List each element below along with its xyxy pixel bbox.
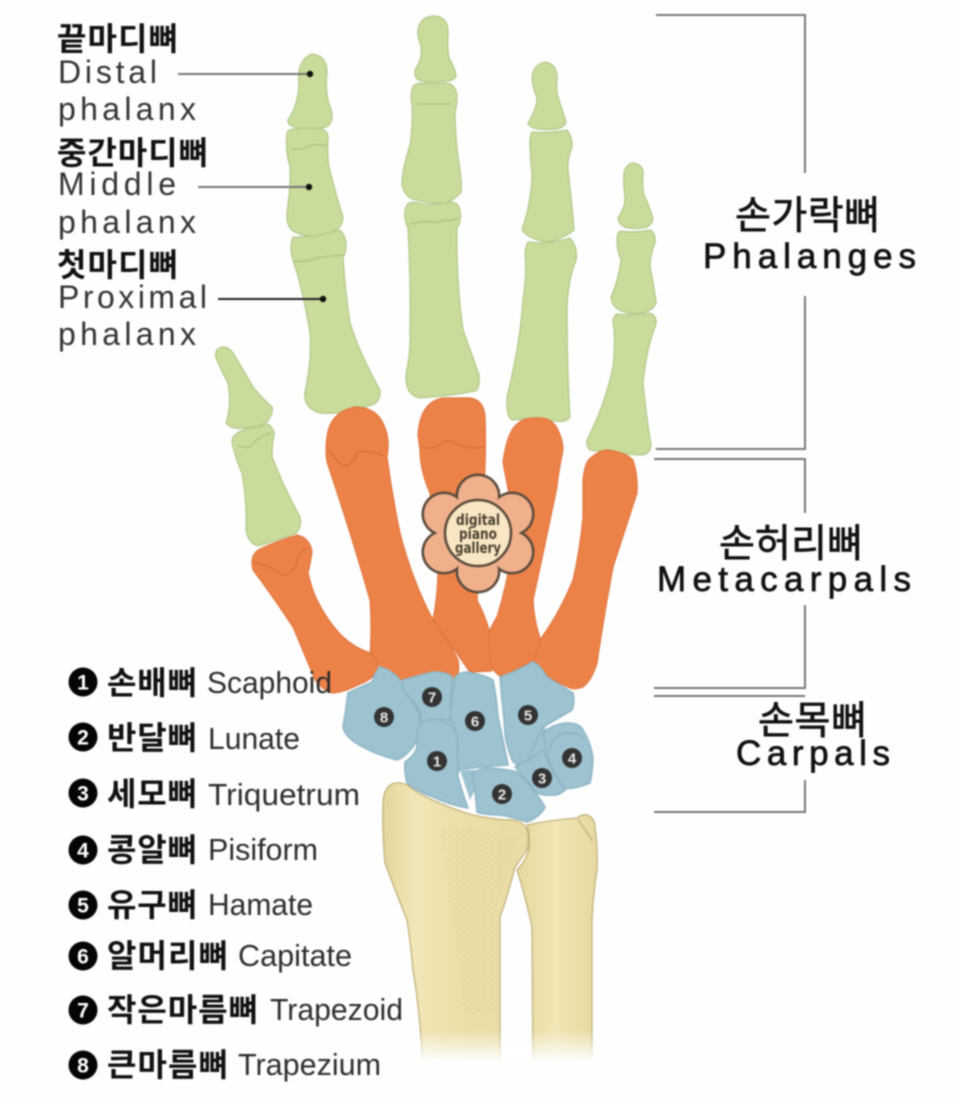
bracket: metacarpals [654,459,805,688]
left labels: phalanx types: phalanx [58,91,196,127]
pointer: distal phalanx [178,71,313,77]
carpal legend: Triquetrum [208,777,360,812]
phalanges bones [216,16,656,546]
left labels: phalanx types: Middle [58,166,176,202]
carpal legend: 반달뼈 [107,720,197,756]
carpal legend [68,665,403,1083]
heading: phalanges: 손가락뼈 [735,195,880,238]
carpal legend: 2 [77,726,89,750]
middle finger bones [402,16,479,398]
carpal number badges [374,687,582,804]
bracket: carpals [654,696,805,812]
index finger bones [286,54,380,413]
carpal bones [343,662,593,822]
carpal legend: Pisiform [208,832,318,867]
carpal legend: 세모뼈 [107,776,197,812]
heading: metacarpals: Metacarpals [657,560,911,599]
carpal number badges: 8 [380,710,388,726]
carpal legend: 4 [77,840,89,862]
pointer: proximal phalanx [218,296,326,302]
carpal number badges: 7 [428,690,436,706]
heading: phalanges [703,195,916,276]
little finger bones [587,163,656,455]
carpal legend: Lunate [208,721,300,756]
left labels: phalanx types: 끝마디뼈 [57,21,178,57]
carpal legend: 손배뼈 [107,665,197,701]
carpal legend: 3 [77,782,89,806]
carpal number badges: 1 [433,754,441,770]
bracket: phalanges [656,15,805,449]
carpal legend: 유구뼈 [107,887,197,923]
carpal number badges: 3 [538,770,546,788]
carpal number badges: 4 [568,750,577,768]
carpal number badges: 2 [498,786,506,804]
carpal legend: 1 [77,672,89,694]
heading: metacarpals [657,523,911,599]
carpal legend: 8 [77,1054,89,1078]
carpal legend: 큰마름뼈 [107,1047,228,1083]
left labels: phalanx types: phalanx [58,204,196,240]
watermark flower logo: piano [459,525,497,543]
carpal legend: 콩알뼈 [107,832,197,868]
radius bone [383,783,528,1070]
left labels: phalanx types: 첫마디뼈 [57,247,178,283]
left labels: phalanx types [57,21,208,352]
watermark flower logo: digital [456,511,500,529]
left labels: phalanx types: Distal [58,54,157,90]
carpal legend: Scaphoid [207,665,332,700]
forearm bottom fade [414,1030,600,1062]
watermark flower logo: gallery [455,539,501,557]
left labels: phalanx types: phalanx [58,316,196,352]
metacarpal bones [252,398,637,693]
heading: phalanges: Phalanges [703,237,916,276]
left labels: phalanx types: 중간마디뼈 [57,135,208,171]
pointer: middle phalanx [198,184,312,190]
watermark flower logo [422,474,534,594]
carpal legend: 작은마름뼈 [107,992,258,1028]
carpal legend: Hamate [208,887,313,922]
carpal number badges: 5 [524,708,532,724]
ulna bone [517,815,597,1070]
carpal legend: 7 [77,1000,89,1022]
left labels: phalanx types: Proximal [58,279,207,315]
carpal legend: 알머리뼈 [107,938,228,974]
heading: metacarpals: 손허리뼈 [719,523,863,566]
heading: carpals [736,700,890,773]
carpal legend: Capitate [238,938,352,973]
heading: carpals: 손목뼈 [758,700,867,743]
carpal legend: 5 [77,894,89,918]
heading: carpals: Carpals [736,734,890,773]
carpal legend: Trapezoid [270,992,403,1027]
carpal legend: 6 [77,946,89,968]
carpal number badges: 6 [471,714,479,730]
ring finger bones [507,62,576,422]
carpal legend: Trapezium [238,1047,381,1082]
thumb bones [216,347,300,546]
